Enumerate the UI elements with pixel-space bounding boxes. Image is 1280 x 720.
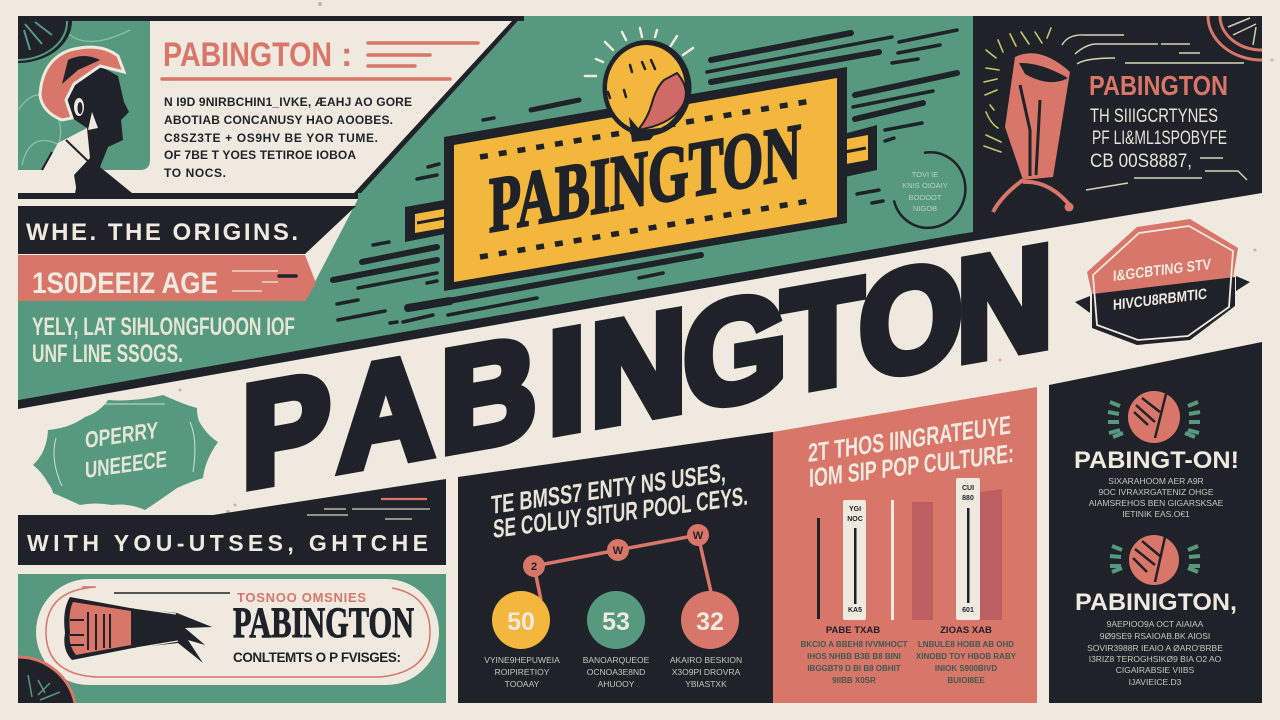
stat circle 32: 32 (696, 608, 724, 636)
portrait backdrop (18, 21, 150, 170)
chart labels: ZIOAS XAB (940, 625, 992, 636)
badge: small circle note: BOOOOT (909, 193, 942, 202)
callout text: PF LI&ML1SPOBYFE (1092, 128, 1227, 149)
pop culture heading (808, 410, 1014, 493)
badge text: UNEEECE (85, 446, 167, 483)
corner emblem (18, 656, 76, 703)
stat captions: AHUOOY (598, 679, 635, 689)
decorative lines (1062, 35, 1247, 190)
panel: salmon ribbon (18, 255, 316, 301)
connector diagram: W (613, 545, 624, 557)
text block: green caption (32, 313, 295, 368)
body text: TO NOCS. (164, 166, 226, 180)
chart notes (801, 640, 1017, 685)
callout text: CB 00S8887, (1090, 151, 1192, 172)
text block: IETINIK EAS.O€1 (1122, 509, 1190, 519)
panel: green diagonal feature background (18, 16, 975, 400)
stats heading: SE COLUY SITUR POOL CEYS. (493, 481, 748, 544)
corner emblem (18, 21, 72, 63)
colon: : (341, 36, 352, 74)
text block: SIXARAHOOM AER A9R (1108, 476, 1204, 486)
icon: fist (64, 593, 230, 663)
bar chart: NOC (847, 516, 863, 523)
panel: stats dark (458, 432, 773, 703)
badge: small circle note: KNIS OIOAIY (902, 181, 948, 190)
stat captions (484, 655, 742, 689)
chart notes: IHOS NHBB B3B B8 BINI (807, 652, 901, 661)
stats heading (491, 457, 748, 544)
heading: origins: WHE. THE ORIGINS. (26, 219, 298, 246)
stat captions: YBIASTXK (685, 679, 727, 689)
stat circle 32 (681, 591, 739, 649)
main title: PABINGTON (242, 214, 1053, 519)
banner stubs (405, 199, 450, 242)
heading: PABINGT-ON! (1074, 447, 1239, 474)
bar chart: YGI (849, 506, 861, 513)
connector diagram: W (693, 530, 704, 542)
bar chart: 601 (962, 607, 974, 614)
panel: pop culture salmon (773, 387, 1037, 703)
bar chart (817, 478, 1002, 620)
bar chart: KA5 (848, 607, 862, 614)
pill kicker: TOSNOO OMSNIES (237, 590, 366, 605)
text block: I3RIZ8 TEROGHSIKØ9 BIA O2 AO (1089, 654, 1222, 664)
chart notes: XINOBD TOY HBOB RABY (916, 652, 1017, 661)
badge: right hexagon label (1075, 219, 1250, 345)
heading: PABINGTON (163, 36, 332, 74)
body text: N I9D 9NIRBCHIN1_IVKE, ÆAHJ AO GORE (164, 95, 412, 109)
stat circle 53: 53 (602, 608, 630, 636)
text block: green caption: YELY, LAT SIHLONGFUOON IOF (32, 313, 295, 341)
text block: green caption: UNF LINE SSOGS. (32, 340, 183, 368)
stat captions: ROIPIRETIOY (495, 667, 550, 677)
icon: round emblem (1110, 535, 1200, 585)
callout heading: PABINGTON (1089, 70, 1228, 101)
speed lines around banner (333, 30, 957, 323)
ribbon label: 1S0DEEIZ AGE (32, 267, 218, 300)
badge text lower: HIVCU8RBMTIC (1113, 285, 1207, 314)
panel: bottom-left pill (18, 574, 446, 703)
text block: IJAVIEICE.D3 (1129, 677, 1182, 687)
body text: C8SZ3TE + OS9HV BE YOR TUME. (164, 131, 378, 145)
icon: portrait of man (40, 47, 132, 193)
corner arcs (1208, 16, 1262, 60)
heading: PABINIGTON, (1075, 589, 1237, 616)
badge text: I&GCBTING STV (1113, 256, 1211, 285)
badge: small circle note: TOVI IE (912, 170, 938, 179)
stat circle 53 (587, 591, 645, 649)
panel: origins dark band (18, 206, 356, 254)
chart notes: INIOK S900BIVD (935, 664, 997, 673)
banner body (444, 67, 847, 291)
text block: AIAMSREHOS BEN GIGARSKSAE (1089, 498, 1224, 508)
text block (1087, 619, 1223, 687)
stat captions: VYINE9HEPUWEIA (484, 655, 560, 665)
banner title: PABINGTON (489, 108, 801, 250)
stat captions: X3O9PI DROVRA (672, 667, 741, 677)
connector diagram: 2 (531, 561, 537, 573)
icon: fruit on banner (585, 28, 693, 142)
chart notes: 9IIBB X0SR (832, 676, 876, 685)
badge: green starburst label (33, 395, 218, 510)
connector diagram (523, 524, 711, 600)
badge text (85, 417, 167, 483)
chart notes: BUIOI8EE (947, 676, 985, 685)
icon: microphone (984, 28, 1074, 212)
stat circle 50: 50 (507, 608, 535, 636)
chart notes: BKCIO A BBEH8 IVVMHOCT (801, 640, 908, 649)
panel: top-right dark callout (18, 16, 1262, 409)
panel: with you-utses band (18, 479, 446, 565)
icon: round emblem (1108, 391, 1200, 443)
pill title: PABINGTON (233, 600, 414, 647)
body text (164, 95, 412, 180)
stat captions: TOOAAY (505, 679, 540, 689)
bar chart: 880 (962, 495, 974, 502)
band text: WITH YOU-UTSES, GHTCHE (27, 530, 428, 556)
text block: 9OC IVRAXRGATENIZ OHGE (1098, 487, 1214, 497)
card frame (18, 16, 524, 199)
body text: OF 7BE T YOES TETIROE IOBOA (164, 148, 356, 162)
text block (1089, 476, 1224, 519)
panel: top-left intro card (18, 16, 524, 199)
chart labels: PABE TXAB (826, 625, 880, 636)
text block: 9Ø9SE9 RSAIOAB.BK AIOSI (1100, 631, 1210, 641)
badge text: OPERRY (85, 417, 158, 453)
text block: SOVIR3988R IEAIO A ØARO'BRBE (1087, 643, 1223, 653)
pop culture heading: 2T THOS IINGRATEUYE (808, 410, 1011, 468)
chart notes: LNBULE8 HOBB AB OHD (918, 640, 1014, 649)
stat captions: OCNOA3E8ND (587, 667, 645, 677)
badge: small circle note (888, 144, 976, 238)
stat captions: AKAIRO BESKION (670, 655, 742, 665)
stats heading: TE BMSS7 ENTY NS USES, (491, 457, 726, 520)
badge: small circle note: NIGOB (913, 204, 937, 213)
pop culture heading: IOM SIP POP CULTURE: (809, 438, 1014, 493)
callout text: TH SIIIGCRTYNES (1090, 106, 1218, 127)
title banner (405, 67, 877, 291)
stat captions: BANOARQUEOE (583, 655, 650, 665)
banner dashes (480, 100, 817, 257)
heading rules (162, 43, 478, 79)
chart notes: IBGGBT9 D BI B8 OBHIT (807, 664, 901, 673)
body text: ABOTIAB CONCANUSY HAO AOOBES. (164, 113, 393, 127)
chart labels (826, 625, 992, 636)
text block: CIGAIRABSIE VIIBS (1116, 665, 1195, 675)
callout text (1090, 106, 1227, 172)
panel: right dark notes (1049, 342, 1262, 703)
pill subtitle: CONLTEMTS O P FVISGES: (233, 650, 401, 665)
stat circle 50 (492, 591, 550, 649)
bar chart: CUI (962, 485, 974, 492)
text block: 9AEPIOO9A OCT AIAIAA (1107, 619, 1204, 629)
